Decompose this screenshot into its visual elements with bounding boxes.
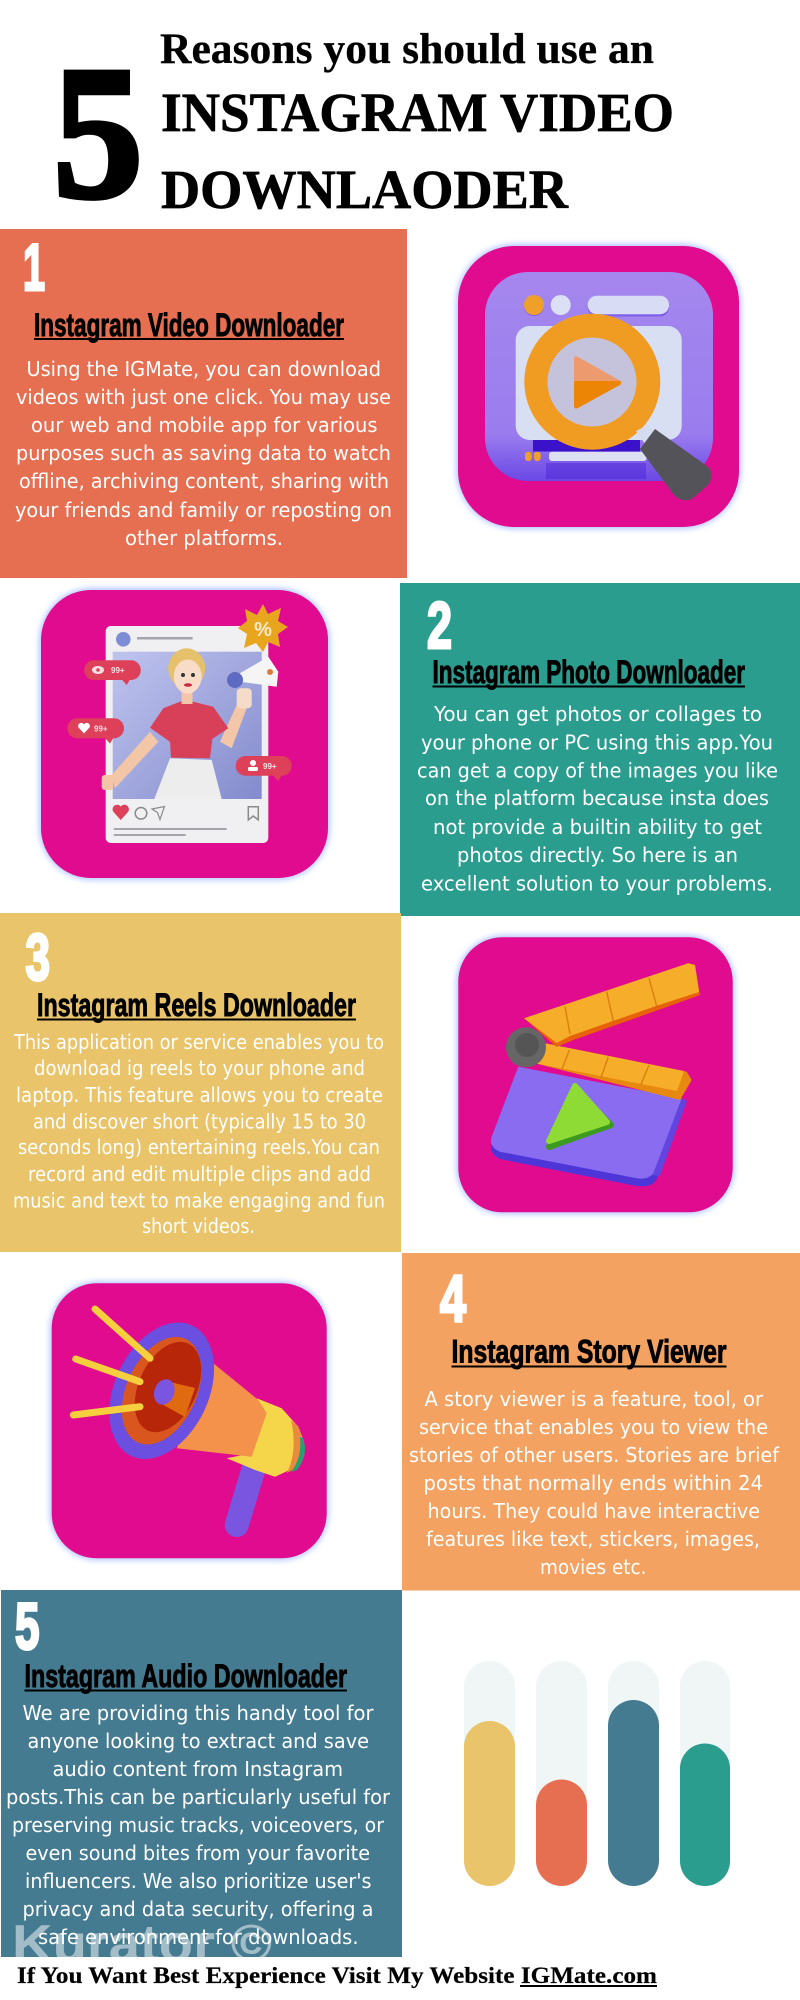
body text: You can get photos or collages to [433, 702, 762, 726]
icon: megaphone [50, 1281, 329, 1560]
body text: influencers. We also prioritize user's [25, 1869, 372, 1893]
body text: A story viewer is a feature, tool, or [424, 1387, 764, 1411]
body text: music and text to make engaging and fun [13, 1188, 385, 1212]
body text: privacy and data security, offering a [22, 1897, 374, 1921]
post action icons [113, 805, 258, 836]
body text [15, 357, 392, 550]
bar chart [464, 1661, 730, 1886]
body text [13, 1030, 385, 1238]
body text: movies etc. [540, 1555, 646, 1579]
bubble: views: 99+ [111, 666, 125, 675]
body text [417, 702, 778, 896]
body text: audio content from Instagram [52, 1757, 343, 1781]
body text: anyone looking to extract and save [28, 1729, 369, 1753]
heading: Instagram Story Viewer [452, 1334, 726, 1370]
body text: service that enables you to view the [419, 1415, 768, 1439]
footer call to action: If You Want Best Experience Visit My Website IGMate.com [17, 1963, 657, 1988]
body text: videos with just one click. You may use [16, 385, 391, 409]
bubble: followers [236, 756, 292, 781]
body text: safe environment for downloads. [38, 1925, 358, 1949]
body text: hours. They could have interactive [428, 1499, 760, 1523]
body text: our web and mobile app for various [31, 413, 378, 437]
panel: 1 Instagram Video Downloader [0, 229, 407, 578]
body text: your friends and family or reposting on [15, 498, 392, 522]
body text: your phone or PC using this app.You [421, 730, 773, 754]
panel: 3 Instagram Reels Downloader [0, 913, 401, 1252]
body text: posts that normally ends within 24 [424, 1471, 763, 1495]
panel: 5 Instagram Audio Downloader [1, 1589, 402, 1973]
body text: on the platform because insta does [425, 786, 769, 810]
number 2: 2 [427, 588, 452, 662]
body text: record and edit multiple clips and add [28, 1162, 371, 1186]
body text: offline, archiving content, sharing with [19, 469, 389, 493]
heading: Instagram Reels Downloader [37, 987, 356, 1023]
body text: other platforms. [125, 526, 283, 550]
body text [6, 1701, 391, 1949]
body text: not provide a builtin ability to get [433, 815, 762, 839]
body text: download ig reels to your phone and [34, 1056, 365, 1080]
body text: seconds long) entertaining reels.You can [18, 1135, 380, 1159]
body text: This application or service enables you to [13, 1030, 384, 1054]
icon: clapperboard [456, 935, 735, 1214]
body text: excellent solution to your problems. [421, 872, 773, 896]
number 3: 3 [26, 920, 50, 994]
number 4: 4 [440, 1261, 466, 1335]
badge: percent [238, 604, 288, 652]
body text: short videos. [142, 1214, 255, 1238]
body text: can get a copy of the images you like [417, 758, 778, 782]
number 1: 1 [23, 230, 45, 304]
body text [409, 1387, 780, 1579]
bubble: likes: 99+ [94, 724, 108, 734]
body text: Using the IGMate, you can download [26, 357, 381, 381]
body text: stories of other users. Stories are brief [409, 1443, 780, 1467]
title line 2: INSTAGRAM VIDEO [161, 82, 674, 143]
body text: and discover short (typically 15 to 30 [33, 1110, 366, 1134]
panel: 4 Instagram Story Viewer [402, 1253, 800, 1590]
number 5: 5 [15, 1589, 40, 1663]
bubble: likes [67, 718, 124, 744]
bubble: followers: 99+ [263, 762, 277, 771]
title [53, 26, 674, 238]
heading: Instagram Video Downloader [34, 307, 344, 343]
watermark: Kurator © [12, 1915, 272, 1973]
title line 3: DOWNLAODER [161, 159, 569, 220]
body text: photos directly. So here is an [457, 843, 738, 867]
bubble: views [84, 660, 141, 685]
body text: purposes such as saving data to watch [16, 441, 391, 465]
body text: posts.This can be particularly useful for [6, 1785, 391, 1809]
character [102, 648, 278, 799]
body text: features like text, stickers, images, [426, 1527, 760, 1551]
icon: instagram post with character [39, 588, 330, 880]
body text: We are providing this handy tool for [22, 1701, 374, 1725]
title line 1: Reasons you should use an [160, 26, 654, 73]
body text: laptop. This feature allows you to create [16, 1083, 383, 1107]
heading: Instagram Audio Downloader [24, 1658, 347, 1694]
badge: percent: % [254, 619, 272, 641]
panel: 2 Instagram Photo Downloader [400, 583, 800, 916]
title: big number 5: 5 [53, 28, 143, 238]
body text: preserving music tracks, voiceovers, or [12, 1813, 385, 1837]
icon: magnifier over video [456, 244, 741, 529]
body text: even sound bites from your favorite [26, 1841, 370, 1865]
